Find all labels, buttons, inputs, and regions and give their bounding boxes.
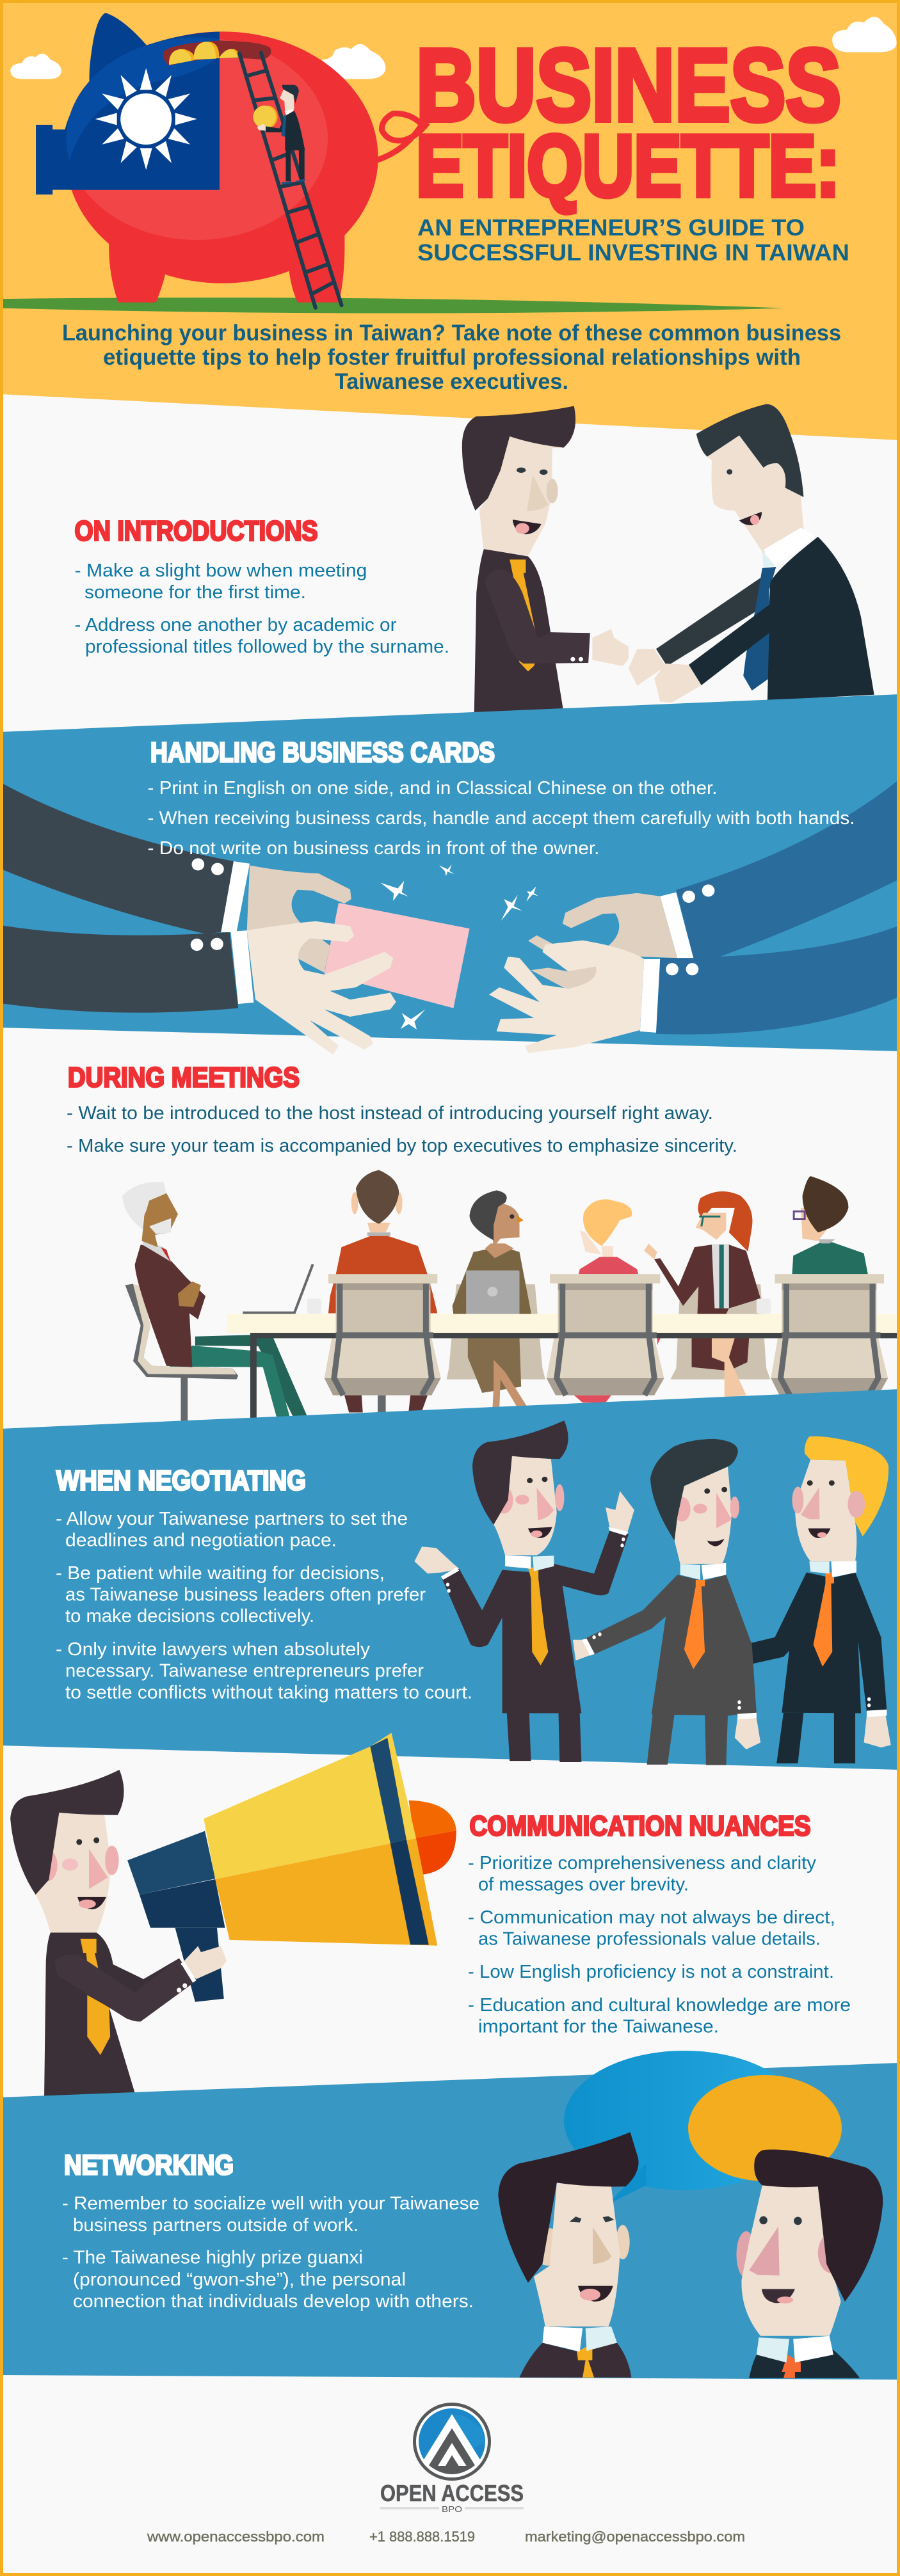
illustration: exchanging business cards	[0, 778, 900, 1054]
intro text: Launching your business in Taiwan? Take note of these common business	[62, 321, 841, 346]
footer contact details	[147, 2529, 745, 2545]
table top	[227, 1314, 900, 1333]
bullet list: - Remember to socialize well with your Taiwanese	[62, 2193, 479, 2214]
business card	[325, 903, 470, 1008]
subtitle	[417, 214, 849, 266]
man C head	[795, 1459, 856, 1561]
bullet list	[62, 2193, 479, 2312]
intro text: etiquette tips to help foster fruitful professional relationships with	[103, 345, 801, 370]
upper left hand	[247, 865, 351, 973]
right cuffs	[640, 893, 693, 1033]
bullet list: - Do not write on business cards in front of the owner.	[147, 838, 599, 859]
man A legs	[507, 1713, 581, 1762]
bullet list	[67, 1103, 737, 1156]
icon: blue speech bubble	[564, 2051, 805, 2204]
bullet list: as Taiwanese professionals value details.	[478, 1928, 821, 1949]
man in orange	[328, 1235, 437, 1313]
ground	[3, 298, 785, 314]
lower right hand	[489, 941, 644, 1053]
pig tail	[376, 113, 428, 161]
bullet list: - Be patient while waiting for decisions,	[56, 1563, 385, 1584]
man suit	[44, 1932, 195, 2097]
heading: HANDLING BUSINESS CARDS	[150, 737, 495, 768]
icon: yellow speech bubble	[688, 2075, 842, 2181]
icon: ladder and businessman	[239, 53, 342, 308]
man in green	[792, 1242, 868, 1274]
section text: handling business cards	[147, 737, 855, 859]
bullet list: business partners outside of work.	[73, 2215, 358, 2236]
flag canton	[36, 13, 220, 195]
woman with laptop	[453, 1248, 531, 1314]
icon: flag sun	[95, 68, 197, 170]
bullet list	[56, 1509, 472, 1703]
subtitle: SUCCESSFUL INVESTING IN TAIWAN	[417, 239, 849, 266]
man C suit	[729, 1572, 887, 1713]
bullet list: (pronounced “gwon-she”), the personal	[73, 2270, 406, 2290]
section text: when negotiating	[56, 1465, 472, 1703]
icon: Open Access logo	[415, 2405, 489, 2479]
section text: networking	[62, 2150, 479, 2312]
subtitle: AN ENTREPRENEUR’S GUIDE TO	[417, 214, 805, 241]
footer contact details: +1 888.888.1519	[369, 2529, 475, 2545]
illustration: man with megaphone	[10, 1733, 456, 2097]
bullet list: - Only invite lawyers when absolutely	[56, 1639, 371, 1660]
background chairs	[447, 1284, 545, 1379]
illustration: three businessmen	[414, 1420, 891, 1765]
man left head	[479, 436, 564, 556]
heading: ON INTRODUCTIONS	[74, 516, 317, 546]
bullet list	[74, 561, 449, 657]
logo wordmark: BPO	[442, 2504, 462, 2514]
bullet list: - Make a slight bow when meeting	[74, 561, 367, 581]
man B hands	[573, 1640, 592, 1660]
man A suit	[442, 1530, 629, 1713]
pig legs	[109, 232, 344, 303]
bullet list: to settle conflicts without taking matters to court.	[65, 1683, 472, 1703]
man B head	[675, 1467, 732, 1564]
back cone	[127, 1831, 215, 1895]
bullet list	[147, 778, 855, 859]
footer contact details: marketing@openaccessbpo.com	[525, 2529, 745, 2545]
panel: yellow header background	[0, 0, 900, 440]
coins	[172, 42, 239, 65]
heading: NETWORKING	[64, 2150, 234, 2181]
speaker	[408, 1801, 456, 1838]
redhead woman	[692, 1338, 749, 1371]
horn	[204, 1733, 416, 1879]
bullet list	[468, 1853, 851, 2037]
bullet list: connection that individuals develop with others.	[73, 2291, 474, 2312]
man B suit	[583, 1575, 757, 1715]
bullet list: - Wait to be introduced to the host instead of introducing yourself right away.	[67, 1103, 713, 1124]
old man legs	[195, 1335, 307, 1416]
front chairs	[325, 1274, 441, 1412]
icon: clouds	[10, 17, 897, 79]
bullet list: - Low English proficiency is not a constraint.	[468, 1962, 834, 1982]
man A head	[494, 1456, 557, 1555]
illustration: meeting table with people	[122, 1170, 900, 1422]
logo wordmark	[380, 2480, 524, 2514]
woman in pink	[602, 1246, 613, 1258]
illustration: piggy bank with Taiwan flag	[36, 13, 378, 303]
bullet list: deadlines and negotiation pace.	[65, 1530, 337, 1551]
heading: COMMUNICATION NUANCES	[470, 1811, 810, 1841]
heading: WHEN NEGOTIATING	[56, 1465, 306, 1496]
bullet list: - Prioritize comprehensiveness and clarity	[468, 1853, 817, 1873]
intro text: Taiwanese executives.	[335, 369, 568, 394]
man B legs	[647, 1714, 728, 1765]
man right head	[736, 2231, 756, 2278]
bullet list: - Print in English on one side, and in Classical Chinese on the other.	[147, 778, 717, 799]
bullet list: someone for the first time.	[84, 582, 306, 603]
panel: networking background	[0, 2063, 900, 2380]
left cuffs	[221, 861, 253, 1004]
heading: DURING MEETINGS	[68, 1062, 300, 1093]
bullet list: - Allow your Taiwanese partners to set the	[56, 1509, 408, 1529]
right sleeves	[676, 778, 900, 958]
intro text	[62, 321, 841, 394]
section text: communication nuances	[468, 1811, 851, 2037]
panel: when negotiating background	[0, 1389, 900, 1770]
panel: handling business cards background	[0, 694, 900, 1051]
lower left hand	[247, 921, 396, 1054]
section text: during meetings	[67, 1062, 737, 1156]
man A hands	[414, 1546, 459, 1573]
bullet list: as Taiwanese business leaders often prefer	[65, 1584, 426, 1605]
pig highlight	[67, 37, 328, 240]
man right suit	[656, 576, 762, 666]
man left suit	[520, 2343, 631, 2378]
old man head	[141, 1193, 178, 1247]
man left head	[531, 2228, 565, 2266]
old man suit	[135, 1244, 205, 1367]
title	[416, 28, 841, 214]
sparkles	[381, 864, 538, 1030]
pig body	[67, 31, 378, 283]
bullet list: - Communication may not always be direct,	[468, 1907, 835, 1928]
old man chair	[125, 1284, 238, 1379]
footer contact details: www.openaccessbpo.com	[147, 2529, 325, 2545]
bullet list: important for the Taiwanese.	[478, 2017, 719, 2037]
logo wordmark: OPEN ACCESS	[380, 2480, 524, 2506]
bullet list: - Address one another by academic or	[74, 615, 397, 635]
man right suit	[749, 2350, 860, 2378]
bullet list: professional titles followed by the surname.	[85, 637, 449, 657]
upper right hand	[563, 893, 677, 958]
handle	[175, 1928, 224, 2002]
bullet list: necessary. Taiwanese entrepreneurs prefer	[65, 1661, 424, 1682]
bullet list: to make decisions collectively.	[65, 1606, 314, 1626]
bullet list: of messages over brevity.	[478, 1875, 689, 1895]
illustration: two men talking	[498, 2132, 883, 2378]
coin slot	[163, 40, 271, 65]
bullet list: - Education and cultural knowledge are more	[468, 1995, 851, 2015]
man C arm and hand	[864, 1715, 891, 1747]
bullet list: - The Taiwanese highly prize guanxi	[62, 2247, 363, 2268]
cuff buttons	[446, 1538, 871, 1710]
bullet list: - When receiving business cards, handle and accept them carefully with both hands.	[147, 808, 855, 829]
man right head	[707, 435, 803, 553]
section text: on introductions	[74, 516, 449, 657]
laptop left	[243, 1264, 313, 1313]
left sleeves	[0, 782, 234, 934]
man head	[36, 1813, 111, 1932]
illustration: two men shaking hands	[462, 404, 874, 715]
man left body	[474, 549, 564, 715]
bullet list: - Make sure your team is accompanied by top executives to emphasize sincerity.	[67, 1136, 737, 1156]
